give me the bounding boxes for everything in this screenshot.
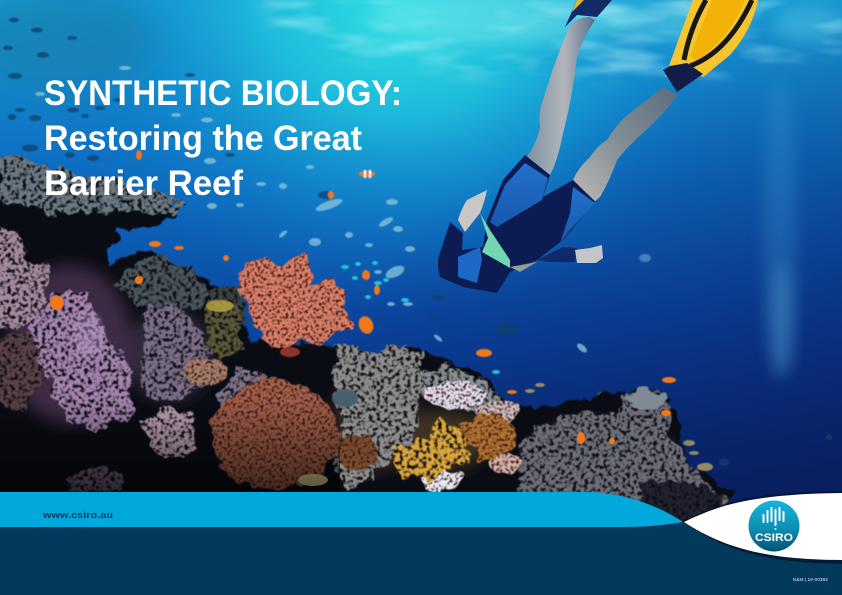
school of small fish [0,18,832,496]
logo wordmark: CSIRO [755,532,793,544]
wetsuit [438,155,595,293]
left fin [565,0,612,27]
hands [458,190,603,263]
weight belt [480,213,537,272]
coral: dark branching centre [113,254,250,324]
suit: right arm [537,247,577,262]
reef dim colour underpaint [8,265,675,490]
surface light ripples [252,0,842,84]
publication code: B&M | 18-00392 [793,577,828,582]
coral: lilac cluster [65,408,195,491]
logo: CSIRO [748,500,800,552]
coral: purple branching left [0,225,135,430]
coral: bleached branching rocks centre [330,345,510,490]
diver [438,0,758,293]
coral: orange-brown boulder [460,412,521,475]
suit panel: side [458,247,482,283]
legs [527,17,678,201]
clownfish and orange reef fish [50,276,671,486]
footer: white wave with shadow [684,491,842,564]
suit panel: right thigh [560,187,595,243]
footer: cyan wave band [0,492,683,527]
title: Restoring the Great [44,119,362,158]
coral: yellow-green dome [203,298,243,358]
coral: pink table coral [240,252,352,357]
reef shadow [0,408,340,492]
suit panel: left thigh [490,163,548,227]
title: Barrier Reef [44,164,243,203]
website address: www.csiro.au [42,510,113,520]
reef base silhouette [0,170,736,504]
coral: small tan rock [183,358,227,386]
coral: yellow encrusting coral [395,420,470,478]
title [44,74,402,203]
coral: grey-violet boulder [140,304,212,404]
coral: upper left table coral [0,154,188,216]
logo signal bars [762,507,784,530]
coral: dark speckled mound right [520,388,730,530]
coral: white cluster [418,381,520,491]
coral: large brain coral [211,365,339,490]
footer: navy band [0,522,842,595]
small clownfish [359,170,375,178]
right fin [663,0,758,92]
title: SYNTHETIC BIOLOGY: [44,74,402,113]
